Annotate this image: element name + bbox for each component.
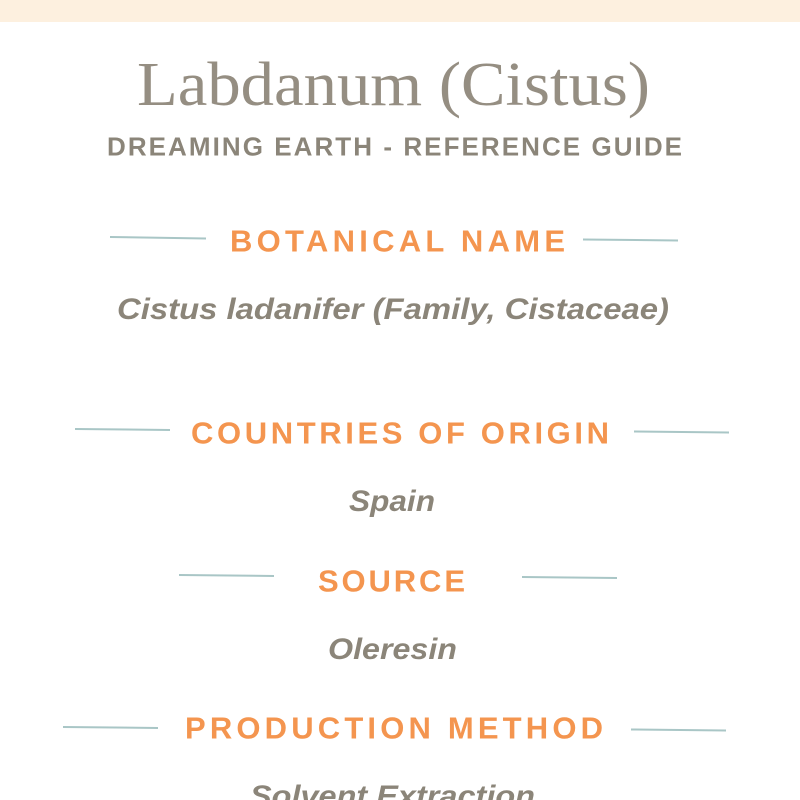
section: source: Oleresin <box>328 633 457 666</box>
section: botanical name: Cistus ladanifer (Family, Cistaceae) <box>117 293 669 326</box>
top banner <box>0 0 800 22</box>
section: source <box>179 564 617 666</box>
section: production method <box>63 710 726 800</box>
section: countries of origin <box>75 416 729 518</box>
section: botanical name: BOTANICAL NAME <box>230 224 565 258</box>
subtitle: DREAMING EARTH - REFERENCE GUIDE <box>107 132 682 162</box>
section: source: SOURCE <box>318 564 465 598</box>
title: Labdanum (Cistus) <box>137 51 650 119</box>
section: botanical name <box>110 224 678 326</box>
section: production method: PRODUCTION METHOD <box>185 710 603 746</box>
section: countries of origin: Spain <box>349 485 435 518</box>
section: countries of origin: COUNTRIES OF ORIGIN <box>191 416 609 450</box>
